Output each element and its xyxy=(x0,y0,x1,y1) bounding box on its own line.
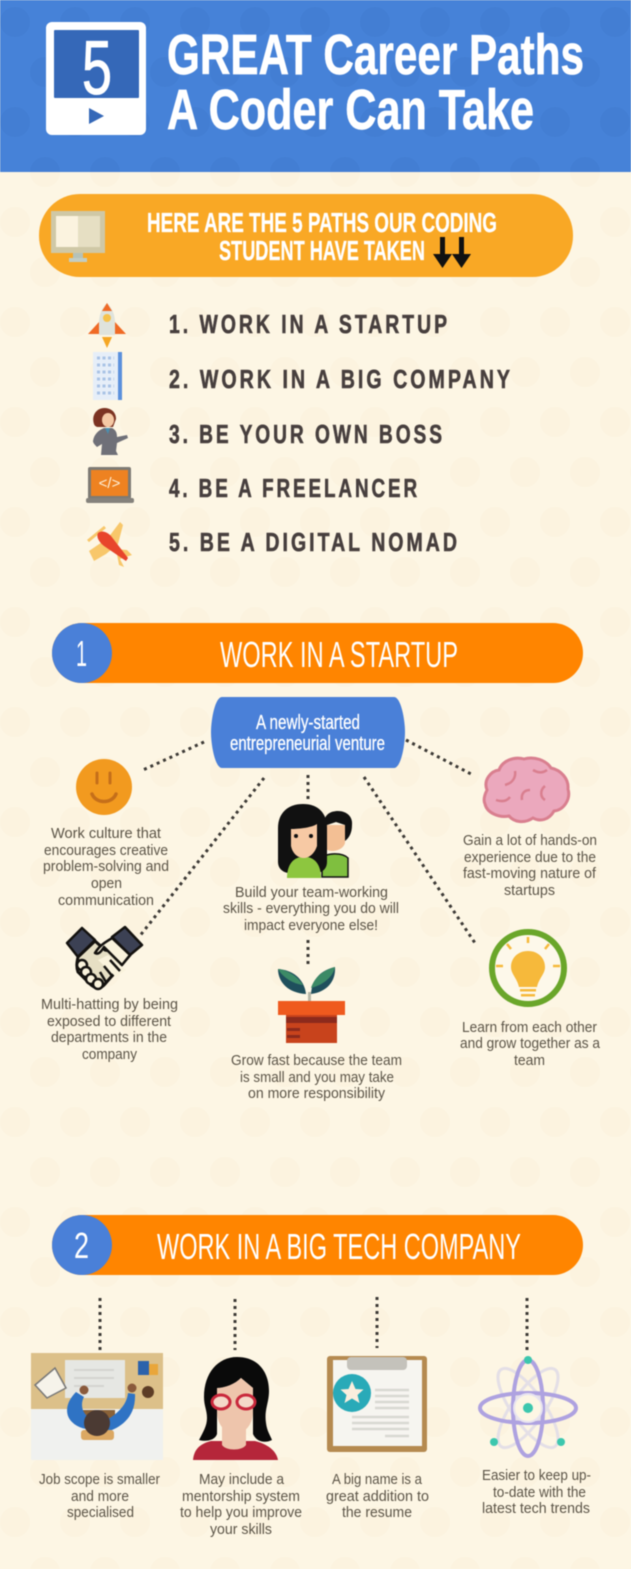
icon: laptop code: </> xyxy=(99,475,121,492)
item: multi-hatting xyxy=(41,927,178,1063)
icon: number 5 screen: 5 xyxy=(82,26,112,111)
section 2 heading bar: 2 xyxy=(74,1225,89,1266)
icon: potted plant xyxy=(278,967,345,1043)
icon: businesswoman xyxy=(93,408,128,455)
connectors: section 2 xyxy=(100,1297,527,1350)
section 1 heading bar: 1 xyxy=(76,633,87,674)
item: tech trends xyxy=(480,1356,591,1517)
section 1 heading bar: WORK IN A STARTUP xyxy=(220,634,458,675)
item: brain: fast-moving nature of xyxy=(463,866,597,882)
item: job scope: Job scope is smaller xyxy=(39,1472,160,1488)
item: team-working: Build your team-working xyxy=(235,885,388,901)
item: resume xyxy=(326,1356,429,1521)
item: tech trends: Easier to keep up- xyxy=(482,1468,591,1484)
item: grow fast: Grow fast because the team xyxy=(231,1053,402,1069)
icon: clipboard xyxy=(327,1356,427,1452)
item: mentorship: your skills xyxy=(210,1522,272,1538)
item: grow fast xyxy=(231,967,402,1102)
icon: handshake xyxy=(67,927,142,989)
item: tech trends: latest tech trends xyxy=(482,1501,590,1517)
icon: smiley xyxy=(76,759,132,815)
list item 3: 3. BE YOUR OWN BOSS xyxy=(169,419,445,449)
banner: intro xyxy=(39,194,573,277)
item: work culture: communication xyxy=(58,893,154,909)
item: resume: great addition to xyxy=(326,1489,429,1505)
item: work culture: encourages creative xyxy=(44,843,168,859)
item: job scope: and more xyxy=(71,1489,129,1505)
central definition pill: A newly-started xyxy=(256,712,360,734)
title xyxy=(167,23,584,142)
item: multi-hatting: exposed to different xyxy=(47,1014,171,1030)
section 1 heading bar xyxy=(52,623,583,683)
item: multi-hatting: company xyxy=(82,1047,138,1063)
item: team-working xyxy=(223,804,399,934)
item: team-working: impact everyone else! xyxy=(244,918,378,934)
item: brain: experience due to the xyxy=(464,850,596,866)
item: learn together xyxy=(460,932,601,1069)
item: multi-hatting: departments in the xyxy=(51,1030,167,1046)
section 2 heading bar xyxy=(52,1215,583,1275)
item: work culture: open xyxy=(91,876,122,892)
item: resume: A big name is a xyxy=(332,1472,423,1488)
item: work culture xyxy=(43,759,169,909)
item: mentorship xyxy=(180,1357,302,1538)
item: learn together: team xyxy=(514,1053,545,1069)
central definition pill xyxy=(211,697,405,768)
icon: brain xyxy=(484,758,569,822)
item: job scope xyxy=(31,1353,163,1521)
list item 2: 2. WORK IN A BIG COMPANY xyxy=(169,364,513,394)
item: tech trends: to-date with the xyxy=(493,1485,586,1501)
central definition pill: entrepreneurial venture xyxy=(230,733,385,755)
icon: number 5 screen xyxy=(46,22,146,135)
icon: person at desk xyxy=(31,1353,163,1460)
list of five paths xyxy=(86,303,513,567)
banner text xyxy=(147,207,497,266)
list item 4: 4. BE A FREELANCER xyxy=(169,473,420,503)
item: work culture: Work culture that xyxy=(51,826,161,842)
icon: atom xyxy=(480,1356,576,1456)
icon: rocket xyxy=(88,303,126,348)
item: mentorship: mentorship system xyxy=(182,1489,300,1505)
item: multi-hatting: Multi-hatting by being xyxy=(41,997,178,1013)
item: mentorship: May include a xyxy=(199,1472,285,1488)
item: brain xyxy=(463,758,597,899)
list item 5: 5. BE A DIGITAL NOMAD xyxy=(169,527,460,557)
item: team-working: skills - everything you do will xyxy=(223,901,399,917)
icon: two people xyxy=(278,804,352,878)
connectors: section 1 xyxy=(139,740,475,967)
item: resume: the resume xyxy=(342,1505,412,1521)
item: mentorship: to help you improve xyxy=(180,1505,302,1521)
item: job scope: specialised xyxy=(67,1505,134,1521)
item: grow fast: is small and you may take xyxy=(240,1070,394,1086)
icon: office building xyxy=(93,352,122,400)
list item 1: 1. WORK IN A STARTUP xyxy=(169,309,450,339)
header band xyxy=(0,0,631,172)
item: brain: Gain a lot of hands-on xyxy=(463,833,597,849)
icon: airplane xyxy=(88,522,132,567)
banner text: STUDENT HAVE TAKEN xyxy=(219,235,425,266)
item: grow fast: on more responsibility xyxy=(248,1086,386,1102)
item: learn together: Learn from each other xyxy=(462,1020,597,1036)
icon: down arrows xyxy=(433,237,471,268)
item: work culture: problem-solving and xyxy=(43,859,169,875)
item: learn together: and grow together as a xyxy=(460,1036,601,1052)
item: brain: startups xyxy=(504,883,555,899)
icon: woman with glasses xyxy=(193,1357,278,1460)
icon: monitor xyxy=(51,211,105,262)
icon: lightbulb xyxy=(492,932,564,1004)
icon: laptop code xyxy=(86,467,134,503)
